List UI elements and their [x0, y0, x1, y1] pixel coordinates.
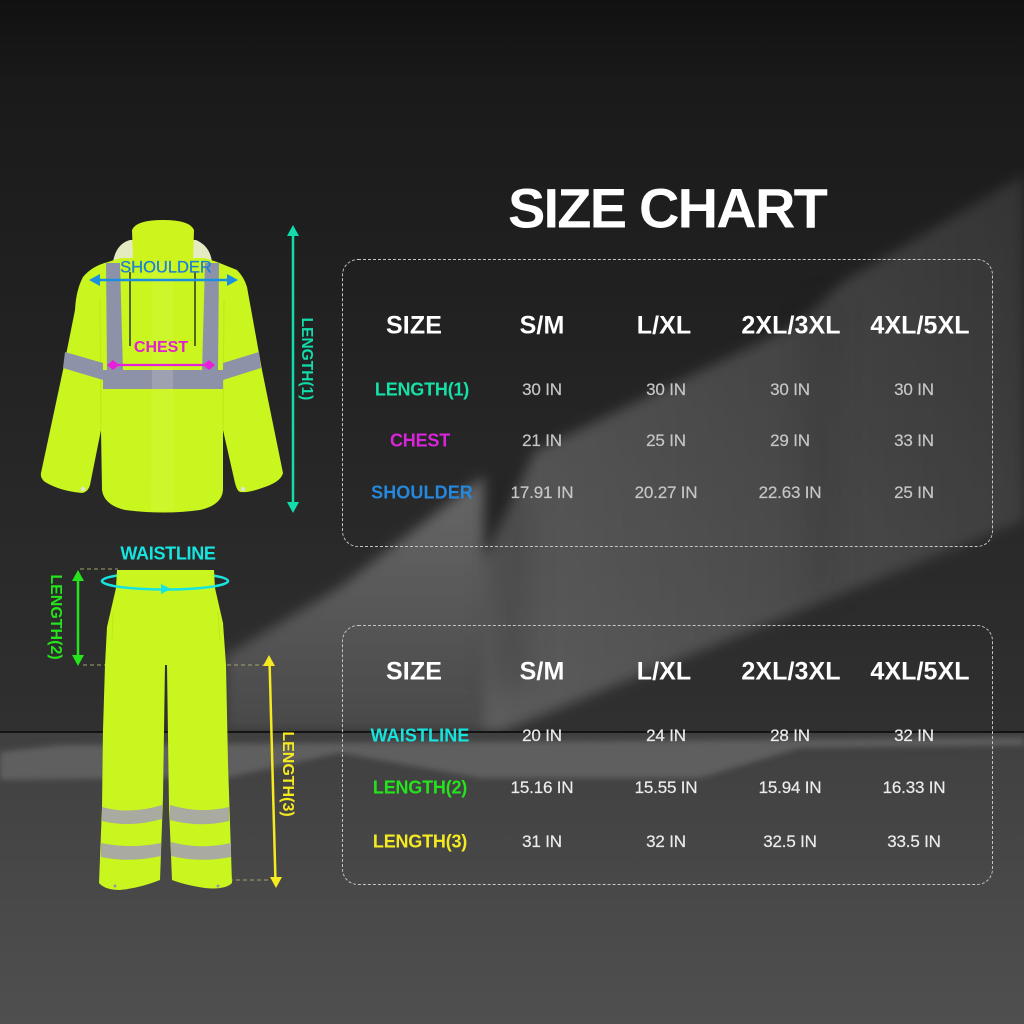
waistline ring, front part and arrow: [102, 581, 228, 594]
jacket table: length 1 row: [375, 380, 934, 400]
reflective chest band: [103, 370, 223, 389]
text: 32 IN: [646, 832, 686, 851]
text: WAISTLINE: [371, 726, 469, 746]
text: 22.63 IN: [759, 483, 821, 502]
trousers: [99, 570, 232, 890]
text: 32 IN: [894, 726, 934, 745]
text: 24 IN: [646, 726, 686, 745]
text: 31 IN: [522, 832, 562, 851]
text: 32.5 IN: [763, 832, 817, 851]
text: 17.91 IN: [511, 483, 573, 502]
jacket table: chest row: [390, 430, 934, 450]
text: LENGTH(1): [375, 380, 469, 400]
text: 33 IN: [894, 431, 934, 450]
panel: jacket size table: [342, 259, 993, 547]
pocket seams: [112, 612, 220, 640]
text: 30 IN: [770, 380, 810, 399]
length 2 arrow: [72, 570, 84, 666]
text: 29 IN: [770, 431, 810, 450]
text: 30 IN: [894, 380, 934, 399]
text: 2XL/3XL: [741, 312, 841, 340]
text: LENGTH(2): [373, 778, 467, 798]
drawstrings: [130, 272, 195, 346]
text: L/XL: [637, 312, 691, 340]
hood lining: [113, 240, 212, 262]
text: 4XL/5XL: [870, 312, 970, 340]
centre placket: [151, 262, 174, 511]
text: CHEST: [390, 430, 450, 450]
text: L/XL: [637, 658, 691, 686]
title: SIZE CHART: [508, 176, 826, 240]
jacket: [41, 220, 283, 512]
label: shoulder: SHOULDER: [120, 258, 212, 276]
text: 20 IN: [522, 726, 562, 745]
shoulder arrow: [89, 274, 238, 286]
trousers table: length 3 row: [373, 832, 941, 852]
trouser legs: [99, 570, 232, 890]
cuff snaps: [81, 487, 85, 491]
label: length 3: LENGTH(3): [279, 731, 296, 817]
text: 4XL/5XL: [870, 658, 970, 686]
chest arrow: [107, 360, 215, 370]
jacket body and sleeves: [41, 258, 283, 512]
upper-band reflective stripes: [102, 805, 229, 824]
text: SIZE: [386, 658, 442, 686]
text: 2XL/3XL: [741, 658, 841, 686]
panel: trousers size table: [342, 625, 993, 885]
text: 33.5 IN: [887, 832, 941, 851]
trousers table: waistline row: [370, 726, 934, 746]
dashed guide lines: [80, 569, 270, 880]
reflective shoulder straps: [106, 263, 219, 372]
length 1 arrow: [287, 225, 299, 513]
text: 30 IN: [522, 380, 562, 399]
jacket table: shoulder row: [371, 482, 934, 502]
text: SHOULDER: [371, 482, 473, 502]
text: 20.27 IN: [635, 483, 697, 502]
sleeve seams: [100, 300, 224, 430]
lower-band reflective stripes: [101, 842, 231, 860]
text: 15.16 IN: [511, 778, 573, 797]
text: 16.33 IN: [883, 778, 945, 797]
length 3 arrow: [263, 655, 282, 888]
text: 21 IN: [522, 431, 562, 450]
text: SIZE: [386, 312, 442, 340]
text: LENGTH(3): [373, 832, 467, 852]
collar: [132, 220, 194, 262]
jacket table: header row: [386, 312, 970, 340]
label: length 2: LENGTH(2): [47, 574, 64, 660]
text: 30 IN: [646, 380, 686, 399]
text: 25 IN: [646, 431, 686, 450]
hem snaps: [114, 884, 116, 888]
text: S/M: [520, 658, 564, 686]
trousers table: header row: [386, 658, 970, 686]
waistline ring, back part: [102, 572, 228, 590]
text: 28 IN: [770, 726, 810, 745]
label: waistline: WAISTLINE: [120, 544, 216, 564]
label: length 1: LENGTH(1): [298, 318, 315, 400]
text: 15.94 IN: [759, 778, 821, 797]
trousers table: length 2 row: [373, 778, 945, 798]
label: chest: CHEST: [134, 339, 188, 356]
text: 15.55 IN: [635, 778, 697, 797]
text: 25 IN: [894, 483, 934, 502]
text: S/M: [520, 312, 564, 340]
